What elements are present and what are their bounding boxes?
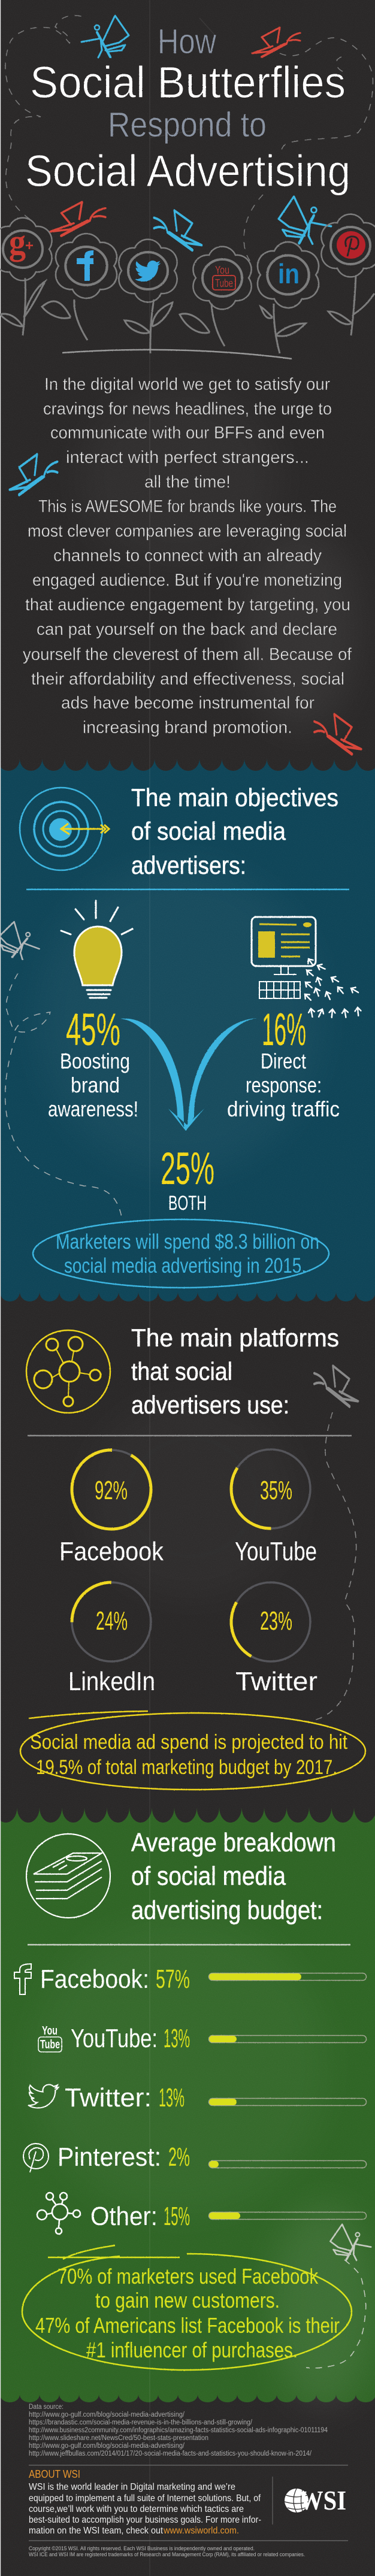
butterfly: red top — [252, 28, 300, 57]
heading: budget — [131, 1828, 336, 1925]
data sources: http://www.business2community.com/infographics/amazing-facts-statistics-social-ads-infographic-01011194 — [29, 2427, 328, 2434]
heading: platforms: advertisers use: — [131, 1391, 289, 1419]
butterfly: red in text — [314, 714, 361, 754]
icon: target with arrow — [20, 788, 109, 870]
data sources: https://brandastic.com/social-media-revenue-is-in-the-billions-and-still-growing/ — [29, 2419, 253, 2426]
panel: objectives — [0, 783, 361, 1288]
hero section — [0, 16, 375, 353]
intro paragraph text: can pat yourself on the back and declare — [37, 620, 337, 639]
heading: platforms — [131, 1324, 339, 1419]
row: Other 15% — [37, 2193, 367, 2234]
callout: ad spend 2015: Marketers will spend $8.3 billion on — [56, 1230, 319, 1254]
row: Pinterest 2%: Pinterest: — [58, 2142, 161, 2172]
stat: 45% boosting brand awareness: brand — [71, 1073, 120, 1097]
copyright: WSI ICE and WSI IM are registered trademarks of Research and Management Corp (RAM), its affiliated or related companies. — [29, 2551, 305, 2558]
donut: Twitter 23% — [217, 1568, 325, 1696]
copyright — [29, 2545, 305, 2558]
about WSI text: equipped to implement a full suite of Internet solutions. But, of — [29, 2493, 261, 2504]
flower: YouTube: Tube — [215, 277, 233, 289]
intro paragraph text: most clever companies are leveraging social — [28, 522, 347, 541]
data sources: http://www.slideshare.net/NewsCred/50-best-stats-presentation — [29, 2435, 208, 2442]
heading: objectives — [131, 783, 338, 879]
butterfly: blue right — [279, 196, 331, 244]
flower: Google Plus: g — [9, 222, 26, 262]
panel: platforms — [20, 1324, 365, 1790]
heading: budget: of social media — [131, 1861, 286, 1891]
row: Facebook 57%: Facebook: — [40, 1964, 149, 1994]
callout: ad spend 2015: social media advertising in 2015. — [64, 1254, 306, 1278]
row: YouTube 13%: You — [42, 2024, 58, 2038]
dashed flight path green — [306, 2260, 366, 2368]
intro paragraph text — [23, 375, 352, 737]
intro paragraph text: channels to connect with an already — [53, 546, 322, 565]
about WSI text: www.wsiworld.com. — [163, 2526, 239, 2536]
icon: network — [26, 1330, 110, 1413]
stat: 45% boosting brand awareness: 45% — [66, 1004, 120, 1055]
flower: Twitter — [119, 240, 177, 353]
heading: objectives: of social media — [131, 817, 286, 845]
butterfly: blue in text — [10, 454, 58, 495]
footer section — [29, 2404, 348, 2558]
about WSI heading: ABOUT WSI — [29, 2468, 80, 2480]
stat: 45% boosting brand awareness: Boosting — [60, 1049, 130, 1073]
flower: LinkedIn: in — [278, 258, 300, 289]
row: Facebook 57% — [14, 1964, 367, 1994]
callout: Facebook influence: #1 influencer of purchases. — [86, 2338, 298, 2362]
row: Twitter 13%: 13% — [159, 2083, 185, 2112]
stat: 25% both: 25% — [161, 1143, 214, 1194]
callout: Facebook influence: to gain new customers. — [95, 2288, 280, 2312]
intro paragraph text: their affordability and effectiveness, social — [31, 670, 344, 689]
stat: 16% direct response: Direct — [261, 1049, 306, 1073]
donut: Facebook 92% — [58, 1436, 165, 1566]
intro paragraph text: This is AWESOME for brands like yours. The — [38, 497, 337, 516]
WSI logo: WSI — [299, 2485, 346, 2516]
row: YouTube 13%: YouTube: — [71, 2024, 158, 2053]
row: Pinterest 2% — [23, 2142, 367, 2172]
butterfly: blue top — [81, 16, 129, 57]
donut: LinkedIn 24% — [68, 1582, 155, 1696]
arrows converging to both — [120, 1018, 257, 1131]
intro paragraph text: engaged audience. But if you're monetizing — [32, 571, 342, 590]
butterfly: grey on green — [330, 2224, 371, 2260]
intro paragraph text: cravings for news headlines, the urge to — [43, 399, 332, 419]
stat: 25% both: BOTH — [168, 1192, 207, 1215]
dashed flight path dark — [314, 1412, 356, 1720]
title: How: How — [158, 22, 217, 61]
stat: 16% direct response: driving traffic — [227, 1097, 340, 1121]
row: Other 15%: 15% — [164, 2202, 190, 2231]
about WSI text: best-suited to accomplish your business goals. For more infor- — [29, 2515, 261, 2525]
flower: Google Plus — [0, 218, 52, 335]
callout: projected spend 2017 — [20, 1711, 365, 1790]
intro paragraph text: In the digital world we get to satisfy our — [44, 375, 330, 394]
row: Facebook 57%: 57% — [156, 1964, 190, 1994]
intro paragraph text: that audience engagement by targeting, you — [25, 595, 350, 615]
stat: 16% direct response: response: — [246, 1073, 322, 1097]
heading: objectives: advertisers: — [131, 851, 246, 879]
data sources — [29, 2404, 328, 2457]
dashed flight path right — [244, 38, 373, 262]
intro paragraph text: interact with perfect strangers... — [66, 448, 309, 467]
flower: Pinterest — [321, 214, 375, 335]
donut: Twitter 23%: 23% — [260, 1606, 292, 1636]
donut: LinkedIn 24%: LinkedIn — [68, 1667, 155, 1696]
stat: 16% direct response: 16% — [262, 1004, 306, 1055]
copyright: Copyright ©2015 WSI. All rights reserved. Each WSI Business is independently owned and operated. — [29, 2545, 255, 2552]
icon: money stack — [26, 1834, 110, 1918]
flower: YouTube: You — [215, 264, 229, 276]
flower: LinkedIn — [258, 242, 319, 353]
flower: YouTube — [180, 247, 252, 346]
donut: Facebook 92%: Facebook — [59, 1537, 164, 1566]
dashed flight path left — [5, 16, 87, 219]
data sources: http://www.go-gulf.com/blog/social-media-advertising/ — [29, 2411, 185, 2418]
callout: Facebook influence: 70% of marketers used Facebook — [58, 2264, 319, 2289]
stat: 45% boosting brand awareness — [48, 1004, 138, 1121]
butterfly: red lower — [50, 202, 105, 236]
stat: 16% direct response — [227, 1004, 340, 1121]
flower: Facebook — [42, 234, 117, 340]
row: Other 15%: Other: — [90, 2202, 158, 2231]
panel: budget breakdown — [14, 1828, 371, 2370]
intro section — [10, 350, 361, 754]
title: Social Advertising: Social Advertising — [25, 146, 350, 196]
row: YouTube 13% — [38, 2024, 367, 2053]
callout: Facebook influence — [22, 2245, 352, 2370]
icon: light bulb — [61, 901, 132, 998]
heading: objectives: The main objectives — [131, 783, 338, 812]
butterfly: grey on teal — [0, 919, 43, 962]
row: YouTube 13%: Tube — [40, 2038, 60, 2051]
heading: budget: advertising budget: — [131, 1896, 323, 1925]
heading: platforms: that social — [131, 1357, 232, 1385]
row: YouTube 13%: 13% — [164, 2024, 190, 2053]
donut: YouTube 35%: YouTube — [235, 1537, 317, 1566]
stat: 25% both — [161, 1143, 214, 1215]
about WSI text: WSI is the world leader in Digital marketing and we’re — [29, 2482, 235, 2492]
donut: YouTube 35%: 35% — [260, 1476, 292, 1505]
dashed flight path teal — [5, 973, 122, 1217]
title: Respond to: Respond to — [108, 105, 267, 144]
data sources: http://www.jeffbullas.com/2014/01/17/20-social-media-facts-and-statistics-you-should-know-in-2014/ — [29, 2450, 312, 2457]
about WSI text — [29, 2482, 261, 2536]
data sources: http://www.go-gulf.com/blog/social-media-advertising/ — [29, 2442, 185, 2450]
intro paragraph text: ads have become instrumental for — [61, 694, 314, 713]
data sources: Data source: — [29, 2404, 63, 2411]
callout: ad spend 2015 — [33, 1219, 329, 1288]
icon: computer with cursor arrows — [252, 917, 361, 1018]
donut: LinkedIn 24%: 24% — [96, 1606, 128, 1636]
donut: Twitter 23%: Twitter — [235, 1667, 317, 1696]
WSI logo — [285, 2485, 346, 2516]
intro paragraph text: increasing brand promotion. — [83, 718, 292, 737]
title: Social Butterflies: Social Butterflies — [30, 57, 346, 107]
row: Pinterest 2%: 2% — [168, 2142, 190, 2172]
donut: YouTube 35% — [231, 1449, 317, 1566]
butterfly: blue middle — [154, 210, 202, 250]
heading: budget: Average breakdown — [131, 1828, 336, 1857]
about WSI text: mation on the WSI team, check out — [29, 2526, 163, 2536]
stat: 45% boosting brand awareness: awareness! — [48, 1097, 138, 1121]
about WSI text: course,we’ll work with you to determine which tactics are — [29, 2504, 244, 2514]
intro paragraph text: all the time! — [144, 473, 231, 492]
row: Twitter 13% — [28, 2083, 367, 2112]
flower: Google Plus: + — [25, 238, 34, 254]
heading: platforms: The main platforms — [131, 1324, 339, 1352]
butterfly: grey on dark — [314, 1366, 358, 1406]
intro paragraph text: communicate with our BFFs and even — [50, 423, 325, 443]
row: Twitter 13%: Twitter: — [65, 2083, 152, 2112]
intro paragraph text: yourself the cleverest of them all. Because of — [23, 645, 352, 664]
donut: Facebook 92%: 92% — [95, 1476, 128, 1505]
